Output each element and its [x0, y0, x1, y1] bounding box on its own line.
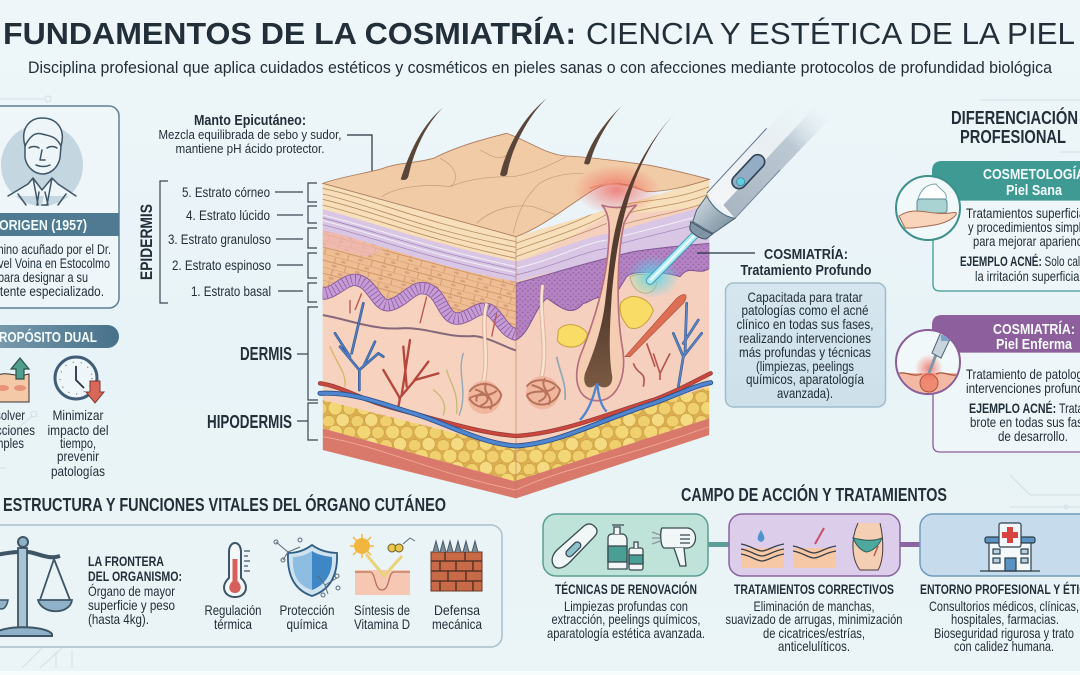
- text: minimizar impacto del tiempo: [48, 408, 108, 479]
- text: técnicas de renovación: TÉCNICAS DE RENOVACIÓN: [555, 580, 697, 597]
- panel: cosmiatría piel enferma: de desarrollo.: [998, 429, 1068, 444]
- function: síntesis de vitamina D: Síntesis de: [354, 603, 410, 618]
- icon: scale: [0, 537, 72, 636]
- follicle, sebaceous gland and muscle: [557, 108, 686, 420]
- origen text: para designar a su: [0, 270, 88, 285]
- hairs: [401, 98, 622, 180]
- text: tratamientos correctivos: suavizado de arrugas, minimización: [726, 612, 902, 627]
- text: técnicas de renovación: Limpiezas profundas con: [564, 599, 688, 614]
- function: defensa mecánica: [431, 541, 482, 632]
- function: regulación térmica: [204, 543, 262, 632]
- top face with cracks: [323, 133, 709, 237]
- panel: técnicas de renovación: [543, 514, 708, 576]
- connectors between treatment panels: [707, 542, 921, 547]
- subtitle: Disciplina profesional que aplica cuidados estéticos y cosméticos en pieles sanas o con afecciones mediante protocolos de profundidad biológica: [28, 59, 1053, 77]
- function: defensa mecánica: mecánica: [432, 617, 482, 632]
- left face layers: [318, 180, 520, 500]
- icon: treatment pen with laser tip: [627, 97, 830, 298]
- right face layers: [513, 177, 713, 500]
- epidermis bracket and strata labels: 3. Estrato granuloso: [168, 232, 271, 247]
- epidermis bracket and strata labels: 1. Estrato basal: [191, 284, 271, 299]
- text: minimizar impacto del tiempo: impacto del: [48, 423, 108, 438]
- function: regulación térmica: térmica: [214, 617, 252, 632]
- panel: cosmiatría description: [726, 283, 886, 407]
- label: cosmiatría tratamiento profundo: [697, 246, 872, 279]
- text: técnicas de renovación: extracción, peelings químicos,: [552, 612, 700, 627]
- text: minimizar impacto del tiempo: prevenir: [57, 449, 99, 464]
- panel: cosmiatría description: avanzada).: [777, 386, 833, 401]
- epidermis bracket and strata labels: 5. Estrato córneo: [182, 185, 270, 200]
- epidermis bracket and strata labels: 4. Estrato lúcido: [186, 208, 270, 223]
- text: resolver afecciones simples: [0, 408, 35, 451]
- text: tratamientos correctivos: Eliminación de manchas,: [754, 599, 874, 614]
- panel: cosmiatría description: Capacitada para tratar: [748, 290, 863, 305]
- icon: inflamed follicle with pen: [895, 330, 962, 397]
- label: cosmiatría tratamiento profundo: COSMIATRÍA:: [764, 246, 848, 263]
- panel: funciones vitales: [0, 525, 502, 647]
- text: la frontera del organismo: (hasta 4kg).: [88, 611, 149, 627]
- panel: cosmiatría description: químicos, aparatología: [746, 372, 864, 387]
- panel: propósito dual: [0, 325, 119, 479]
- text: minimizar impacto del tiempo: patologías: [51, 464, 105, 479]
- text: tratamientos correctivos: anticelulíticos.: [778, 639, 850, 654]
- function: protección química: química: [286, 617, 328, 632]
- panel: cosmiatría description: clínico en todas sus fases,: [736, 317, 874, 332]
- heading: estructura y funciones: ESTRUCTURA Y FUNCIONES VITALES DEL ÓRGANO CUTÁNEO: [3, 494, 446, 515]
- text: la frontera del organismo: DEL ORGANISMO:: [88, 568, 182, 584]
- label: manto epicutáneo: Mezcla equilibrada de sebo y sudor,: [158, 127, 342, 142]
- epidermis bracket and strata labels: EPIDERMIS: [137, 204, 156, 280]
- text: técnicas de renovación: [547, 580, 705, 641]
- title: CIENCIA Y ESTÉTICA DE LA PIEL: [586, 16, 1075, 51]
- text: tratamientos correctivos: TRATAMIENTOS CORRECTIVOS: [734, 581, 894, 597]
- function: síntesis de vitamina D: Vitamina D: [354, 617, 410, 632]
- text: entorno profesional: [920, 581, 1080, 654]
- title: FUNDAMENTOS DE LA COSMIATRÍA:: [3, 16, 576, 51]
- panel: cosmetología piel sana: Piel Sana: [1006, 182, 1063, 199]
- icon: clock with down arrow: [55, 357, 104, 403]
- panel: cosmetología piel sana: [896, 161, 1080, 291]
- origen text: [0, 242, 111, 299]
- label: manto epicutáneo: Manto Epicutáneo:: [194, 113, 306, 129]
- heading: diferenciación profesional: [951, 107, 1078, 147]
- text: la frontera del organismo: Órgano de mayor: [88, 583, 175, 599]
- dermis vessels: [320, 303, 711, 446]
- label: dermis: DERMIS: [240, 344, 292, 364]
- text: minimizar impacto del tiempo: Minimizar: [52, 408, 104, 423]
- icon: hand with cream jar: [896, 176, 960, 240]
- label: manto epicutáneo: [158, 113, 372, 185]
- epidermis bracket and strata labels: 2. Estrato espinoso: [172, 258, 271, 273]
- text: tratamientos correctivos: [726, 581, 902, 654]
- origen header band: [0, 213, 119, 236]
- function: protección química: Protección: [280, 603, 334, 618]
- function: regulación térmica: Regulación: [204, 603, 262, 618]
- panel: cosmiatría description: (limpiezas, peelings: [756, 359, 854, 374]
- text: la frontera del organismo: superficie y peso: [88, 597, 175, 613]
- label: hipodermis: HIPODERMIS: [207, 412, 292, 432]
- epidermis bracket and strata labels: [137, 181, 318, 440]
- panel: entorno profesional: [920, 514, 1080, 576]
- text: minimizar impacto del tiempo: tiempo,: [60, 436, 96, 451]
- panel: cosmiatría piel enferma: [895, 315, 1080, 452]
- panel: origen 1957: [0, 106, 119, 308]
- heading: campo de acción: CAMPO DE ACCIÓN Y TRATAMIENTOS: [681, 484, 947, 505]
- icon: portrait of Dr. Voina: [1, 118, 83, 206]
- text: la frontera del organismo: LA FRONTERA: [88, 553, 164, 569]
- front edge: [515, 237, 517, 498]
- panel: cosmiatría description: más profundas y técnicas: [739, 345, 871, 360]
- icon: skin with up arrow: [0, 358, 29, 402]
- text: la frontera del organismo: [88, 553, 182, 627]
- label: manto epicutáneo: mantiene pH ácido protector.: [176, 141, 324, 156]
- skin cube illustration: [318, 97, 830, 500]
- text: entorno profesional: con calidez humana.: [954, 639, 1054, 654]
- function: síntesis de vitamina D: [350, 534, 415, 632]
- panel: cosmiatría description: realizando intervenciones: [739, 331, 871, 346]
- title: [3, 16, 1075, 51]
- text: tratamientos correctivos: de cicatrices/estrías,: [763, 626, 865, 641]
- function: defensa mecánica: Defensa: [434, 603, 480, 618]
- label: cosmiatría tratamiento profundo: Tratamiento Profundo: [740, 262, 872, 279]
- function: protección química: [274, 538, 340, 632]
- text: técnicas de renovación: aparatología estética avanzada.: [547, 626, 705, 641]
- panel: cosmiatría description: patologías como el acné: [742, 303, 869, 318]
- origen header band: ORIGEN (1957): [0, 217, 87, 234]
- panel: tratamientos correctivos: [729, 514, 900, 576]
